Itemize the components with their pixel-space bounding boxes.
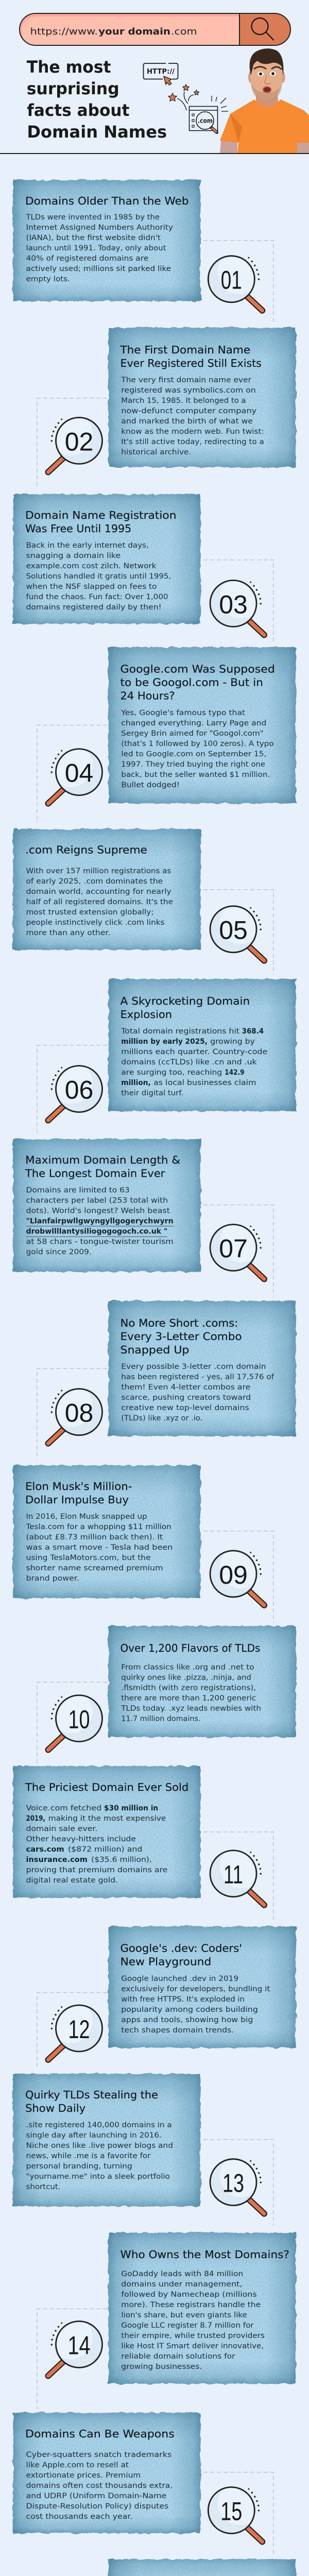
body text: followed by Namecheap (millions bbox=[121, 2291, 257, 2299]
body text: proving that premium domains are bbox=[26, 1866, 168, 1874]
icon: magnifier number 02: 02 bbox=[65, 427, 93, 456]
body text: more than any other. bbox=[26, 929, 110, 937]
body text: shortcut. bbox=[26, 2183, 61, 2191]
body text: tech shapes domain trends. bbox=[121, 2026, 234, 2035]
body text: as local businesses claim bbox=[153, 1079, 256, 1087]
body text: has been registered - yes, all 17,576 of bbox=[121, 1373, 274, 1381]
body text: them! Even 4-letter combos are bbox=[121, 1383, 250, 1392]
icon: magnifier number 09: 09 bbox=[219, 1561, 248, 1589]
body text: of early 2025, .com dominates the bbox=[26, 877, 163, 886]
heading: 24 Hours? bbox=[121, 689, 175, 702]
body text: their digital turf. bbox=[121, 1089, 183, 1097]
body text: extortionate prices. Premium bbox=[26, 2471, 141, 2480]
body text: popularity among coders building bbox=[121, 2006, 258, 2014]
fact card 4 bbox=[108, 647, 296, 803]
body text: shorter name screamed premium bbox=[26, 1564, 163, 1572]
body text: insurance.com bbox=[26, 1856, 88, 1864]
body text: $30 million in bbox=[104, 1804, 158, 1812]
body text: Voice.com fetched bbox=[26, 1804, 101, 1812]
body text: cars.com bbox=[26, 1845, 64, 1854]
body text: With over 157 million registrations as bbox=[26, 867, 171, 875]
body text bbox=[26, 2451, 173, 2521]
body text: (that's 1 followed by 100 zeros). A typo bbox=[121, 740, 274, 748]
icon: magnifier number 04: 04 bbox=[65, 759, 93, 788]
body text bbox=[26, 1187, 174, 1257]
body text: 2019, bbox=[26, 1815, 45, 1823]
body text: and UDRP (Uniform Domain-Name bbox=[26, 2492, 166, 2500]
icon: magnifier number 12 bbox=[48, 2005, 102, 2060]
icon: magnifier number 06 bbox=[48, 1066, 102, 1121]
icon: magnifier number 01 bbox=[208, 256, 262, 311]
body text: snagging a domain like bbox=[26, 552, 121, 560]
body text: actively used; millions sit parked like bbox=[26, 265, 171, 273]
body text: characters per label (253 total with bbox=[26, 1197, 168, 1205]
body text: Other heavy-hitters include bbox=[26, 1835, 136, 1843]
body text: domains (ccTLDs) like .cn and .uk bbox=[121, 1058, 258, 1066]
divider under header bbox=[0, 153, 309, 154]
fact card 15 bbox=[13, 2413, 200, 2533]
heading: Google's .dev: Coders' bbox=[121, 1942, 242, 1955]
icon: magnifier number 06: 06 bbox=[65, 1076, 93, 1105]
heading bbox=[119, 344, 262, 369]
body text: dots). World's longest? Welsh beast bbox=[26, 1207, 170, 1215]
body text bbox=[121, 2270, 265, 2371]
heading bbox=[25, 509, 176, 535]
body text: It's still active today, redirecting to a bbox=[121, 438, 264, 446]
icon: http browser box with cursor bbox=[143, 63, 178, 85]
body text: most trusted extension globally; bbox=[26, 908, 153, 917]
body text: millions each quarter. Country-code bbox=[121, 1048, 267, 1056]
icon: magnifier number 05: 05 bbox=[219, 916, 248, 945]
icon: magnifier number 02 bbox=[48, 417, 102, 472]
heading: Ever Registered Still Exists bbox=[121, 357, 262, 369]
body text: news, while .me is a favorite for bbox=[26, 2152, 151, 2160]
body text: growing by bbox=[210, 1038, 255, 1046]
body text: Cyber-squatters snatch trademarks bbox=[26, 2451, 171, 2459]
heading: Google.com Was Supposed bbox=[121, 663, 275, 675]
body text: drobwllllantysiliogogogoch.co.uk " bbox=[26, 1228, 167, 1236]
body text bbox=[121, 1363, 274, 1422]
heading: Every 3-Letter Combo bbox=[121, 1330, 242, 1343]
icon: browser window with .com magnifier bbox=[190, 96, 228, 132]
icon: magnifier number 07 bbox=[210, 1225, 264, 1279]
body text: changed everything. Larry Page and bbox=[121, 719, 266, 727]
body text: more). These registrars handle the bbox=[121, 2301, 261, 2309]
body text: 11.7 million domains. bbox=[121, 1715, 201, 1723]
heading: Over 1,200 Flavors of TLDs bbox=[121, 1642, 261, 1654]
fact card 1 bbox=[13, 180, 200, 301]
search bar bbox=[20, 13, 290, 45]
title: surprising bbox=[27, 79, 119, 98]
icon: magnifier number 11 bbox=[210, 1851, 264, 1905]
body text: March 15, 1985. It belonged to a bbox=[121, 397, 246, 405]
body text: empty lots. bbox=[26, 275, 70, 283]
body text: Back in the early internet days, bbox=[26, 541, 149, 550]
icon: magnifier number 04 bbox=[48, 749, 102, 804]
body text: domains under management, bbox=[121, 2280, 242, 2289]
heading: The Priciest Domain Ever Sold bbox=[25, 1781, 188, 1793]
body text: million by early 2025, bbox=[121, 1038, 208, 1046]
body text: 368.4 bbox=[242, 1027, 264, 1036]
body text: lion's share, but even giants like bbox=[121, 2311, 247, 2319]
body text bbox=[25, 213, 173, 283]
body text: example.com cost zilch. Network bbox=[26, 562, 157, 570]
body text: using TeslaMotors.com, but the bbox=[26, 1554, 151, 1562]
heading: Dollar Impulse Buy bbox=[25, 1494, 129, 1506]
body text: Solutions handled it gratis until 1995, bbox=[26, 572, 171, 581]
body text: people instinctively click .com links bbox=[26, 919, 165, 927]
heading: Elon Musk's Million- bbox=[25, 1480, 132, 1493]
body text: registered was symbolics.com on bbox=[121, 386, 256, 395]
icon: magnifier number 10: 10 bbox=[68, 1705, 90, 1734]
body text: domain world, accounting for nearly bbox=[26, 888, 171, 896]
body text: growing businesses. bbox=[121, 2363, 202, 2371]
heading bbox=[25, 2089, 158, 2114]
icon: stars and fireworks bbox=[168, 84, 199, 110]
fact card 11 bbox=[13, 1766, 200, 1898]
body text bbox=[26, 2121, 173, 2191]
heading: New Playground bbox=[121, 1956, 211, 1968]
heading bbox=[121, 663, 275, 702]
icon: browser window with .com magnifier: .com bbox=[198, 117, 213, 125]
fact card 2 bbox=[108, 328, 296, 467]
fact card 3 bbox=[13, 494, 200, 624]
body text bbox=[121, 1027, 267, 1097]
body text bbox=[25, 1513, 173, 1583]
body text: fund the chaos. Fun fact: Over 1,000 bbox=[26, 593, 168, 601]
icon: magnifier number 10 bbox=[48, 1695, 102, 1750]
body text: In 2016, Elon Musk snapped up bbox=[26, 1513, 147, 1521]
icon: magnifier number 05 bbox=[210, 906, 264, 961]
heading: The Longest Domain Ever bbox=[25, 1167, 165, 1180]
heading: to be Googol.com - But in bbox=[121, 676, 263, 689]
body text: Sergey Brin aimed for "Googol.com" bbox=[121, 730, 264, 738]
heading: Domain Name Registration bbox=[25, 509, 176, 521]
heading: Domains Older Than the Web bbox=[25, 195, 189, 207]
heading bbox=[121, 1942, 242, 1968]
body text: ($872 million) and bbox=[68, 1845, 142, 1854]
body text: Dispute-Resolution Policy) disputes bbox=[26, 2502, 168, 2511]
body text: quirky ones like .pizza, .ninja, and bbox=[121, 1674, 251, 1682]
body text: are surging too, reaching bbox=[121, 1069, 222, 1077]
heading: Maximum Domain Length & bbox=[25, 1154, 180, 1166]
icon: magnifier number 11: 11 bbox=[224, 1860, 243, 1889]
body text: From classics like .org and .net to bbox=[121, 1664, 254, 1672]
body text bbox=[121, 376, 264, 456]
body text: Total domain registrations hit bbox=[121, 1027, 239, 1036]
body text: like Host IT Smart deliver innovative, bbox=[121, 2342, 264, 2350]
icon: magnifier number 03: 03 bbox=[219, 590, 248, 619]
fact card 9 bbox=[13, 1465, 200, 1598]
body text: historical archive. bbox=[121, 448, 191, 456]
body text: .site registered 140,000 domains in a bbox=[26, 2121, 172, 2129]
heading: The First Domain Name bbox=[119, 344, 250, 356]
title: The most bbox=[27, 57, 111, 77]
fact card 6 bbox=[108, 979, 296, 1111]
body text: single day after launching in 2016. bbox=[26, 2131, 162, 2140]
body text: reliable domain solutions for bbox=[121, 2352, 235, 2361]
heading bbox=[121, 1317, 242, 1356]
heading: No More Short .coms: bbox=[121, 1317, 238, 1329]
heading: Who Owns the Most Domains? bbox=[121, 2248, 289, 2261]
title: facts about bbox=[27, 100, 129, 120]
body text: (about £8.73 million back then). It bbox=[26, 1533, 163, 1541]
body text: back, but the seller wanted $1 million. bbox=[121, 771, 270, 779]
body text: Every possible 3-letter .com domain bbox=[121, 1363, 266, 1371]
icon: magnifier number 08: 08 bbox=[65, 1399, 93, 1428]
body text: Google LLC register 8.7 million for bbox=[121, 2321, 254, 2330]
icon: magnifier number 15: 15 bbox=[220, 2497, 242, 2526]
body text: cost thousands each year. bbox=[26, 2513, 133, 2521]
body text: when the NSF slapped on fees to bbox=[26, 583, 157, 591]
icon: magnifier number 01: 01 bbox=[221, 266, 242, 295]
fact card 7 bbox=[13, 1139, 200, 1272]
heading bbox=[25, 1480, 132, 1506]
icon: magnifier number 15 bbox=[208, 2487, 262, 2542]
body text: and marked the birth of what we bbox=[121, 417, 253, 426]
fact card 16 bbox=[108, 2559, 296, 2576]
body text: .flsmidth (with zero registrations), bbox=[121, 1684, 256, 1692]
icon: magnifier number 13 bbox=[210, 2159, 264, 2214]
body text: apps and tools, showing how big bbox=[121, 2016, 253, 2024]
body text: led to Google.com on September 15, bbox=[121, 750, 266, 758]
body text: there are more than 1,200 generic bbox=[121, 1694, 256, 1703]
body text: Yes, Google's famous typo that bbox=[121, 709, 246, 717]
icon: magnifier number 07: 07 bbox=[219, 1234, 248, 1263]
body text: 40% of registered domains are bbox=[26, 255, 148, 263]
fact card 14 bbox=[108, 2232, 296, 2384]
body text: was a smart move - Tesla had been bbox=[26, 1544, 173, 1552]
body text: scarce, pushing creators toward bbox=[121, 1394, 251, 1402]
body text: "yourname.me" into a sleek portfolio bbox=[26, 2173, 170, 2181]
body text: ($35.6 million), bbox=[91, 1856, 152, 1864]
search bar: https://www. bbox=[30, 26, 98, 37]
heading: Snapped Up bbox=[121, 1344, 189, 1356]
body text: Internet Assigned Numbers Authority bbox=[26, 224, 173, 232]
body text: GoDaddy leads with 84 million bbox=[121, 2270, 243, 2278]
body text: 142.9 bbox=[225, 1069, 245, 1077]
icon: magnifier number 14 bbox=[48, 2321, 102, 2376]
body text: domain sale ever. bbox=[26, 1825, 97, 1833]
body text: with free HTTPS. It's exploded in bbox=[121, 1995, 245, 2004]
heading: .com Reigns Supreme bbox=[25, 843, 147, 856]
icon: http browser box with cursor: HTTP:// bbox=[147, 68, 175, 76]
body text: (IANA), but the first website didn't bbox=[26, 234, 161, 242]
body text bbox=[26, 541, 171, 612]
body text: at 58 chars - tongue-twister tourism bbox=[26, 1238, 174, 1246]
heading: Quirky TLDs Stealing the bbox=[25, 2089, 158, 2101]
icon: magnifier number 08 bbox=[48, 1389, 102, 1444]
fact card 5 bbox=[13, 829, 200, 950]
body text: creative new top-level domains bbox=[121, 1404, 249, 1412]
body text: Niche ones like .live power blogs and bbox=[26, 2142, 173, 2150]
search bar: .com bbox=[171, 26, 197, 37]
body text: exclusively for developers, bundling it bbox=[121, 1985, 270, 1993]
body text: million, bbox=[121, 1079, 151, 1087]
body text: now-defunct computer company bbox=[121, 407, 256, 415]
icon: magnifier number 12: 12 bbox=[68, 2015, 90, 2044]
body text: TLDs were invented in 1985 by the bbox=[25, 213, 160, 222]
body text: The very first domain name ever bbox=[121, 376, 251, 384]
body text: brand power. bbox=[26, 1574, 79, 1583]
body text: their empire, while trusted providers bbox=[121, 2332, 265, 2340]
heading: Explosion bbox=[121, 1008, 172, 1021]
body text: launch until 1991. Today, only about bbox=[26, 244, 166, 252]
icon: magnifier number 09 bbox=[210, 1551, 264, 1605]
body text: Google launched .dev in 2019 bbox=[121, 1975, 238, 1983]
icon: magnifier number 13: 13 bbox=[222, 2169, 244, 2198]
body text: 1997. They tried buying the right one bbox=[121, 760, 265, 769]
body text bbox=[121, 1664, 261, 1723]
heading bbox=[25, 1154, 180, 1180]
body text: know as the modern web. Fun twist: bbox=[121, 428, 264, 436]
body text bbox=[121, 709, 274, 789]
body text: gold since 2009. bbox=[26, 1248, 92, 1257]
heading: Domains Can Be Weapons bbox=[25, 2428, 175, 2440]
fact card 13 bbox=[13, 2074, 200, 2206]
heading: Was Free Until 1995 bbox=[25, 522, 131, 535]
body text bbox=[26, 867, 173, 937]
title: Domain Names bbox=[27, 122, 167, 142]
illustration: surprised man in orange t-shirt bbox=[220, 48, 309, 153]
heading bbox=[121, 995, 250, 1021]
title bbox=[27, 57, 167, 142]
body text: making it the most expensive bbox=[48, 1815, 166, 1823]
body text: like Apple.com to resell at bbox=[26, 2461, 129, 2469]
icon: magnifier number 03 bbox=[210, 580, 264, 635]
heading: A Skyrocketing Domain bbox=[121, 995, 250, 1007]
fact card 12 bbox=[108, 1926, 296, 2048]
heading: Show Daily bbox=[25, 2102, 85, 2114]
body text: (TLDs) like .xyz or .io. bbox=[121, 1414, 202, 1422]
icon: magnifier number 14: 14 bbox=[68, 2331, 91, 2360]
body text: digital real estate gold. bbox=[26, 1876, 118, 1885]
body text: domains often cost thousands extra, bbox=[26, 2482, 173, 2490]
body text: personal branding, turning bbox=[26, 2162, 132, 2171]
body text: Domains are limited to 63 bbox=[26, 1187, 130, 1195]
body text: TLDs today. .xyz leads newbies with bbox=[121, 1705, 261, 1713]
body text: Tesla.com for a whopping $11 million bbox=[25, 1523, 171, 1531]
body text: half of all registered domains. It's the bbox=[26, 898, 173, 906]
search bar: your domain bbox=[98, 26, 170, 37]
body text: Bullet dodged! bbox=[121, 781, 180, 789]
body text: "Llanfairpwllgwyngyllgogerychwyrn bbox=[26, 1217, 174, 1226]
body text bbox=[121, 1975, 270, 2035]
fact card 10 bbox=[108, 1626, 296, 1737]
fact card 8 bbox=[108, 1301, 296, 1436]
body text bbox=[26, 1804, 168, 1885]
body text: domains registered daily by then! bbox=[26, 603, 162, 612]
